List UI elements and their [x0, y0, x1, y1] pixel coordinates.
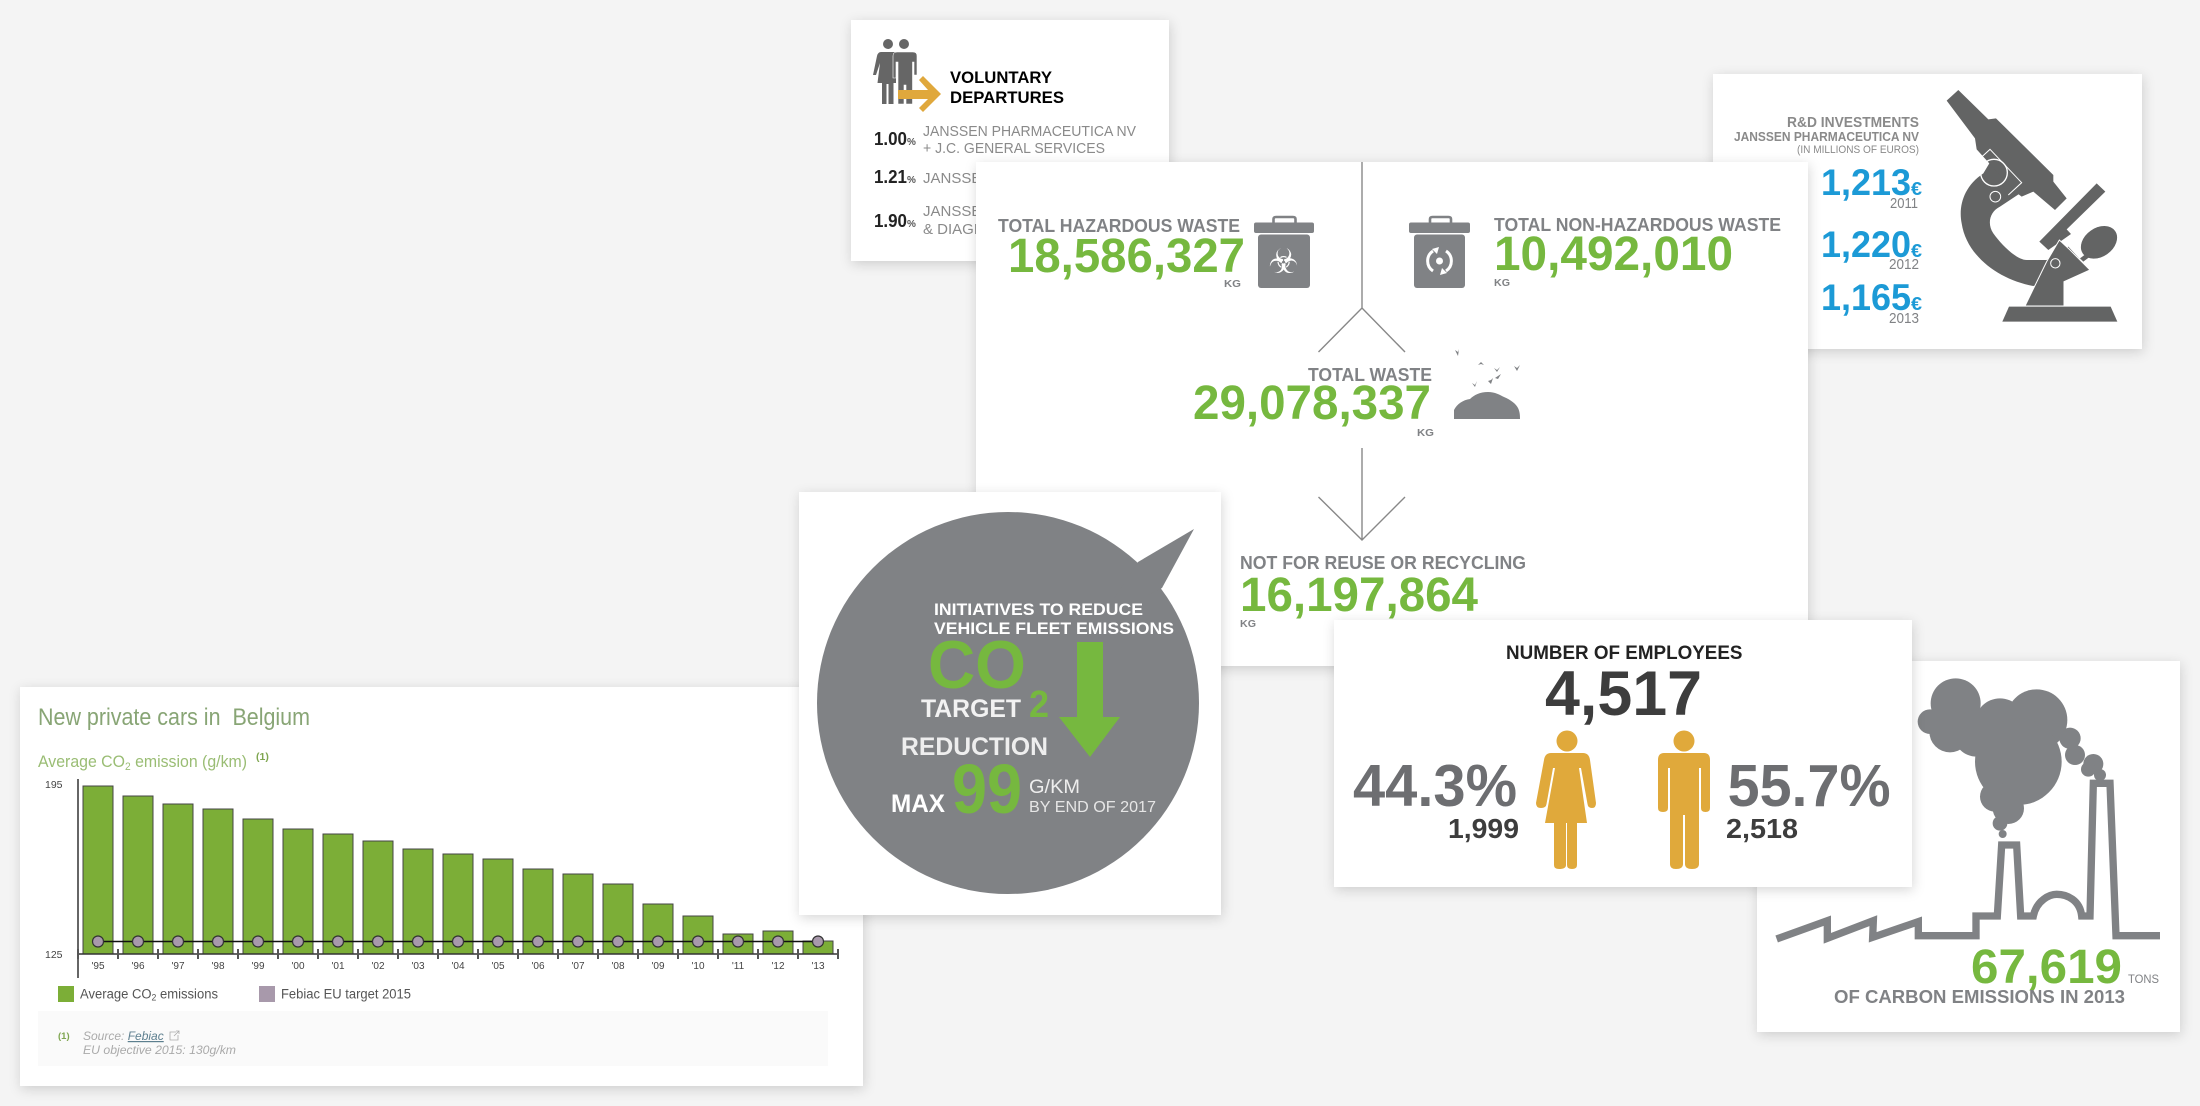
carbon figure — [1834, 941, 2159, 1007]
CO2 target: TARGET — [921, 695, 1021, 723]
merge arrow — [1318, 162, 1405, 352]
non-hazardous waste figure: 10,492,010 — [1494, 228, 1733, 281]
bar chart: '08 — [611, 961, 625, 972]
heading: JANSSEN PHARMACEUTICA NV — [1734, 129, 1919, 144]
investment figures: 2013 — [1889, 310, 1919, 327]
panel: vehicle fleet emissions — [799, 492, 1221, 915]
non-hazardous waste figure: TOTAL NON-HAZARDOUS WASTE — [1494, 215, 1781, 235]
bar chart: '12 — [771, 961, 785, 972]
non-hazardous waste figure: KG — [1494, 277, 1510, 289]
legend: Average CO — [80, 986, 154, 1002]
CO2 target — [901, 627, 1049, 761]
icon: woman — [1536, 730, 1596, 869]
hazardous waste figure: 18,586,327 — [1008, 230, 1245, 283]
investment figures: 2012 — [1889, 256, 1919, 273]
icon: recycling bin — [1409, 217, 1470, 288]
panel: carbon emissions — [1757, 661, 2180, 1032]
not for reuse figure: KG — [1240, 618, 1256, 630]
female share: 1,999 — [1448, 813, 1519, 844]
legend: emissions — [156, 986, 218, 1002]
departure rates: % — [907, 137, 916, 148]
down arrow — [1318, 448, 1405, 540]
investment figures — [1821, 162, 1922, 327]
investment figures: 2011 — [1890, 195, 1918, 212]
departure rates: JANSSEN — [923, 170, 992, 187]
icon: waste pile with birds — [1454, 349, 1520, 419]
female share: 44.3% — [1353, 753, 1517, 819]
hazardous waste figure: TOTAL HAZARDOUS WASTE — [998, 216, 1240, 236]
bar chart: '01 — [331, 961, 345, 972]
total waste figure: TOTAL WASTE — [1308, 365, 1432, 385]
departure rates: 1.00 — [874, 129, 907, 149]
chart title: New private cars in Belgium — [38, 704, 310, 731]
bar chart: '04 — [451, 961, 465, 972]
departure rates: JANSSEN — [923, 203, 992, 220]
panel: new private cars chart — [20, 687, 863, 1086]
legend — [58, 986, 411, 1002]
panel: waste totals — [976, 162, 1808, 666]
male share: 55.7% — [1728, 753, 1891, 819]
bar chart: '95 — [91, 961, 105, 972]
carbon figure: OF CARBON EMISSIONS IN 2013 — [1834, 987, 2125, 1007]
departure rates: JANSSEN PHARMACEUTICA NV — [923, 123, 1136, 140]
max 99 g/km: MAX — [891, 790, 945, 818]
icon: microscope — [1947, 90, 2124, 322]
bar chart: '09 — [651, 961, 665, 972]
source footnote: (1) — [58, 1031, 70, 1042]
bar chart: '06 — [531, 961, 545, 972]
departure rates — [874, 123, 1136, 238]
investment figures: 1,220 — [1821, 224, 1911, 265]
bubble heading — [934, 600, 1174, 638]
departure rates: % — [907, 219, 916, 230]
bar chart: '07 — [571, 961, 585, 972]
bar chart — [45, 779, 838, 978]
heading: (IN MILLIONS OF EUROS) — [1797, 144, 1919, 156]
chart subtitle: emission (g/km) — [131, 752, 247, 771]
heading: NUMBER OF EMPLOYEES — [1506, 643, 1742, 664]
bar chart: '99 — [251, 961, 265, 972]
not for reuse figure: NOT FOR REUSE OR RECYCLING — [1240, 553, 1526, 573]
bar chart: 125 — [45, 949, 63, 961]
footnote marker: (1) — [256, 751, 269, 763]
icon: factory with smoke — [1777, 678, 2160, 939]
departure rates: & DIAGNOSTICS — [923, 221, 1041, 238]
source footnote: Source: Febiac — [83, 1029, 164, 1043]
chart subtitle: 2 — [125, 761, 131, 773]
legend: 2 — [152, 992, 156, 1002]
max 99 g/km: 99 — [952, 750, 1022, 828]
departure rates: 1.90 — [874, 211, 907, 231]
departure rates: % — [907, 175, 916, 186]
max 99 g/km: G/KM — [1029, 777, 1080, 798]
bubble heading: INITIATIVES TO REDUCE — [934, 600, 1143, 619]
bar chart: '02 — [371, 961, 385, 972]
total waste figure: 29,078,337 — [1193, 377, 1431, 430]
source footnote: EU objective 2015: 130g/km — [83, 1043, 236, 1057]
bar chart: '98 — [211, 961, 225, 972]
chart subtitle: Average CO — [38, 752, 131, 771]
panel: number of employees — [1334, 620, 1912, 887]
carbon figure: TONS — [2128, 974, 2159, 986]
panel: R&D investments — [1713, 74, 2142, 349]
heading — [1734, 115, 1919, 156]
icon: green down arrow — [1059, 642, 1120, 757]
investment figures: 1,213 — [1821, 162, 1911, 203]
investment figures: € — [1911, 179, 1922, 199]
hazardous waste figure: KG — [1224, 278, 1241, 290]
source footnote — [38, 1011, 828, 1066]
bar chart: '03 — [411, 961, 425, 972]
male share: 2,518 — [1726, 813, 1798, 844]
icon: biohazard bin: ☣ — [1268, 242, 1299, 282]
total waste figure: KG — [1417, 427, 1434, 439]
panel: voluntary departures: DEPARTURES — [950, 88, 1064, 107]
departure rates: + J.C. GENERAL SERVICES — [923, 140, 1105, 157]
icon: two people with arrow — [873, 39, 941, 112]
bar chart: '05 — [491, 961, 505, 972]
icon: biohazard bin — [1254, 217, 1314, 288]
investment figures: € — [1911, 294, 1922, 314]
not for reuse figure — [1240, 553, 1526, 630]
hazardous waste figure — [998, 216, 1245, 290]
departure rates: 1.21 — [874, 167, 907, 187]
panel: voluntary departures — [851, 20, 1169, 261]
bar chart: '11 — [732, 961, 745, 972]
bubble heading: VEHICLE FLEET EMISSIONS — [934, 619, 1174, 638]
CO2 target: CO — [928, 627, 1026, 703]
bar chart: 195 — [45, 779, 63, 791]
icon: man — [1658, 730, 1710, 869]
legend: Febiac EU target 2015 — [281, 986, 411, 1002]
CO2 target: REDUCTION — [901, 733, 1048, 761]
bar chart: '00 — [291, 961, 305, 972]
max 99 g/km: BY END OF 2017 — [1029, 799, 1156, 816]
bar chart: '13 — [811, 961, 825, 972]
investment figures: 1,165 — [1821, 277, 1911, 318]
bar chart: '96 — [131, 961, 145, 972]
non-hazardous waste figure — [1494, 215, 1781, 289]
heading: R&D INVESTMENTS — [1787, 115, 1919, 131]
investment figures: € — [1911, 241, 1922, 261]
heading: VOLUNTARY — [950, 68, 1053, 87]
not for reuse figure: 16,197,864 — [1240, 569, 1478, 622]
carbon figure: 67,619 — [1971, 941, 2122, 994]
bar chart: '97 — [171, 961, 185, 972]
speech bubble — [817, 512, 1199, 894]
total employees: 4,517 — [1545, 659, 1702, 729]
max 99 g/km — [891, 750, 1156, 828]
bar chart: '10 — [691, 961, 705, 972]
CO2 target: 2 — [1029, 684, 1049, 726]
